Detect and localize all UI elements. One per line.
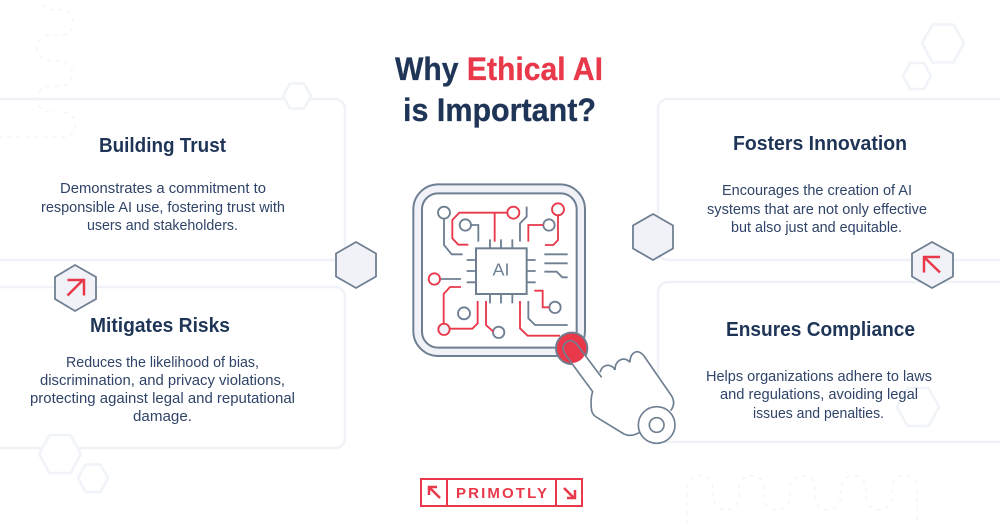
text block: mitigates risks: protecting against legal and reputational: [30, 391, 295, 407]
text block: mitigates risks: Reduces the likelihood of bias,: [66, 355, 259, 371]
decoration: pale hexagon right panel: [897, 388, 939, 426]
central processor: [476, 248, 527, 294]
wrist ring: [638, 407, 675, 443]
pointing hand and red button: [556, 333, 675, 443]
text block: mitigates risks: damage.: [133, 409, 192, 425]
icon: arrow hexagon right: [912, 242, 953, 288]
red showing through fingertip: [557, 334, 586, 363]
text block: ensures compliance: Ensures Compliance: [726, 318, 915, 341]
text block: ensures compliance: [706, 318, 932, 422]
panel: fosters innovation outline: [658, 99, 1000, 260]
title: Why Ethical AI: [395, 51, 603, 87]
hand outline: [563, 341, 674, 435]
text block: building trust: users and stakeholders.: [87, 218, 238, 234]
chip frame: [413, 184, 585, 356]
text block: building trust: [41, 134, 285, 234]
decoration: dashed wave bottom right: [687, 475, 917, 524]
logo: Primotly: PRIMOTLY: [456, 485, 547, 502]
illustration: AI chip with pointing hand: [413, 184, 675, 443]
text block: mitigates risks: Mitigates Risks: [90, 314, 230, 337]
panel: building trust outline: [0, 99, 345, 260]
text block: mitigates risks: [30, 314, 295, 425]
text block: ensures compliance: and regulations, avoiding legal: [720, 387, 918, 403]
panel: ensures compliance outline: [658, 282, 1000, 442]
text block: fosters innovation: systems that are not only effective: [707, 202, 927, 218]
decoration: pale hexagon bottom left large: [39, 435, 81, 473]
text block: fosters innovation: Fosters Innovation: [733, 132, 907, 155]
text block: fosters innovation: [707, 132, 927, 236]
text block: ensures compliance: Helps organizations adhere to laws: [706, 369, 932, 385]
central processor: AI: [492, 259, 509, 279]
button ring: [556, 333, 587, 364]
decoration: pale hexagon top right large: [922, 24, 964, 62]
text block: ensures compliance: issues and penalties.: [753, 406, 884, 422]
panel: mitigates risks outline: [0, 287, 345, 448]
text block: mitigates risks: discrimination, and privacy violations,: [40, 373, 285, 389]
decoration: dashed wave top left: [0, 5, 76, 137]
text block: fosters innovation: but also just and equitable.: [731, 220, 902, 236]
icon: gray hexagon right: [633, 214, 673, 260]
title: [395, 51, 603, 128]
text block: fosters innovation: Encourages the creation of AI: [722, 183, 912, 199]
text block: building trust: responsible AI use, fostering trust with: [41, 200, 285, 216]
decoration: pale hexagon top right small: [903, 63, 931, 89]
circuit traces red: [429, 203, 564, 336]
hand fill: [563, 341, 674, 435]
logo: Primotly: [421, 479, 582, 506]
title: is Important?: [403, 92, 596, 128]
decoration: pale hexagon top left: [283, 84, 311, 108]
text block: building trust: Building Trust: [99, 134, 226, 157]
text block: building trust: Demonstrates a commitment to: [60, 181, 266, 197]
circuit traces gray: [438, 207, 568, 338]
decoration: pale hexagon bottom left small: [78, 464, 108, 492]
icon: gray hexagon left: [336, 242, 376, 288]
icon: arrow hexagon left: [55, 265, 96, 311]
